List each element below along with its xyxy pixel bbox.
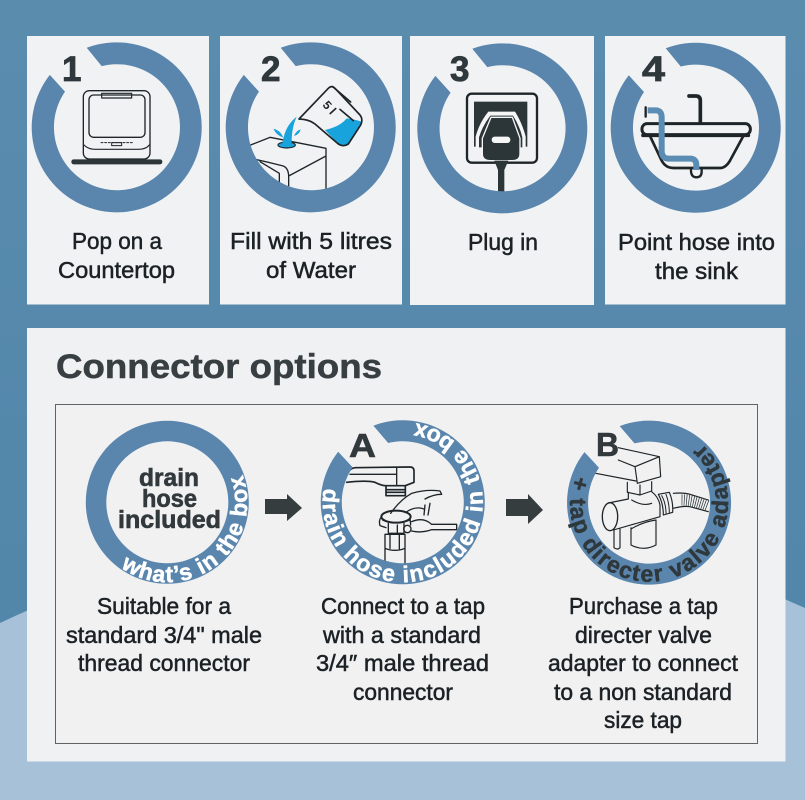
step 2 caption [230, 228, 392, 283]
ring centre label: hose [142, 485, 197, 513]
step 2 caption: Fill with 5 litres [230, 228, 392, 254]
caption: connector [353, 679, 453, 705]
ring centre label [118, 464, 221, 534]
icon: dishwasher on countertop [71, 91, 162, 164]
icon: sink with drain hose [642, 96, 750, 177]
caption: Purchase a tap [569, 593, 718, 619]
arrow 1 [265, 494, 302, 521]
letter A: A [349, 427, 376, 464]
caption: to a non standard [554, 679, 732, 705]
ring B with text: + tap directer valve adapter [568, 446, 730, 582]
caption [548, 593, 738, 733]
step 2 caption: of Water [266, 257, 356, 283]
panel: step 4 [605, 36, 786, 304]
arrow 2 [506, 494, 543, 524]
heading: Connector options [56, 348, 382, 386]
step 4 caption: Point hose into [618, 229, 775, 255]
ring 1 [32, 42, 202, 212]
caption [316, 593, 489, 705]
caption: Suitable for a [97, 593, 232, 619]
number 4: 4 [642, 50, 666, 89]
ring with what's in the box: what’s in the box [122, 474, 248, 583]
step 1 caption: Pop on a [72, 228, 163, 254]
icon: jug pouring water into tank: 5 l [320, 98, 339, 117]
caption: adapter to connect [548, 650, 738, 676]
caption: thread connector [78, 650, 250, 676]
caption: directer valve [575, 622, 712, 648]
ring 2 [226, 42, 396, 212]
caption: 3/4″ male thread [316, 650, 489, 676]
option: drain hose included [66, 420, 262, 676]
caption: with a standard [322, 622, 481, 648]
panel: connector options [27, 328, 786, 762]
panel: step 1 [27, 36, 209, 304]
step 1 caption: Countertop [58, 257, 175, 283]
icon: wall socket and plug [467, 94, 537, 192]
caption: standard 3/4" male [66, 622, 262, 648]
caption: Connect to a tap [321, 593, 485, 619]
step 3 caption: Plug in [468, 229, 538, 255]
icon: hose connecting to tap [347, 467, 457, 564]
ring 3 [417, 43, 587, 213]
number 1: 1 [62, 50, 81, 89]
panel: step 3 [410, 36, 594, 305]
ring with what's in the box [86, 420, 249, 584]
step 1 caption [58, 228, 175, 283]
caption: size tap [604, 707, 682, 733]
ring 4 [611, 43, 781, 213]
options frame [56, 404, 758, 744]
option B: tap directer valve [548, 420, 738, 734]
number 3: 3 [450, 50, 469, 89]
panel: step 2 [220, 36, 402, 304]
ring centre label: drain [139, 464, 199, 492]
option A: standard tap [316, 420, 489, 705]
caption [66, 593, 262, 676]
ring centre label: included [118, 506, 221, 534]
icon: tap directer valve adapter [596, 448, 708, 549]
icon: jug pouring water into tank [251, 87, 362, 189]
number 2: 2 [261, 50, 280, 89]
letter B: B [596, 426, 619, 463]
ring A with text: drain hose included in the box [322, 422, 484, 583]
step 4 caption: the sink [655, 258, 738, 284]
step 4 caption [618, 229, 775, 284]
